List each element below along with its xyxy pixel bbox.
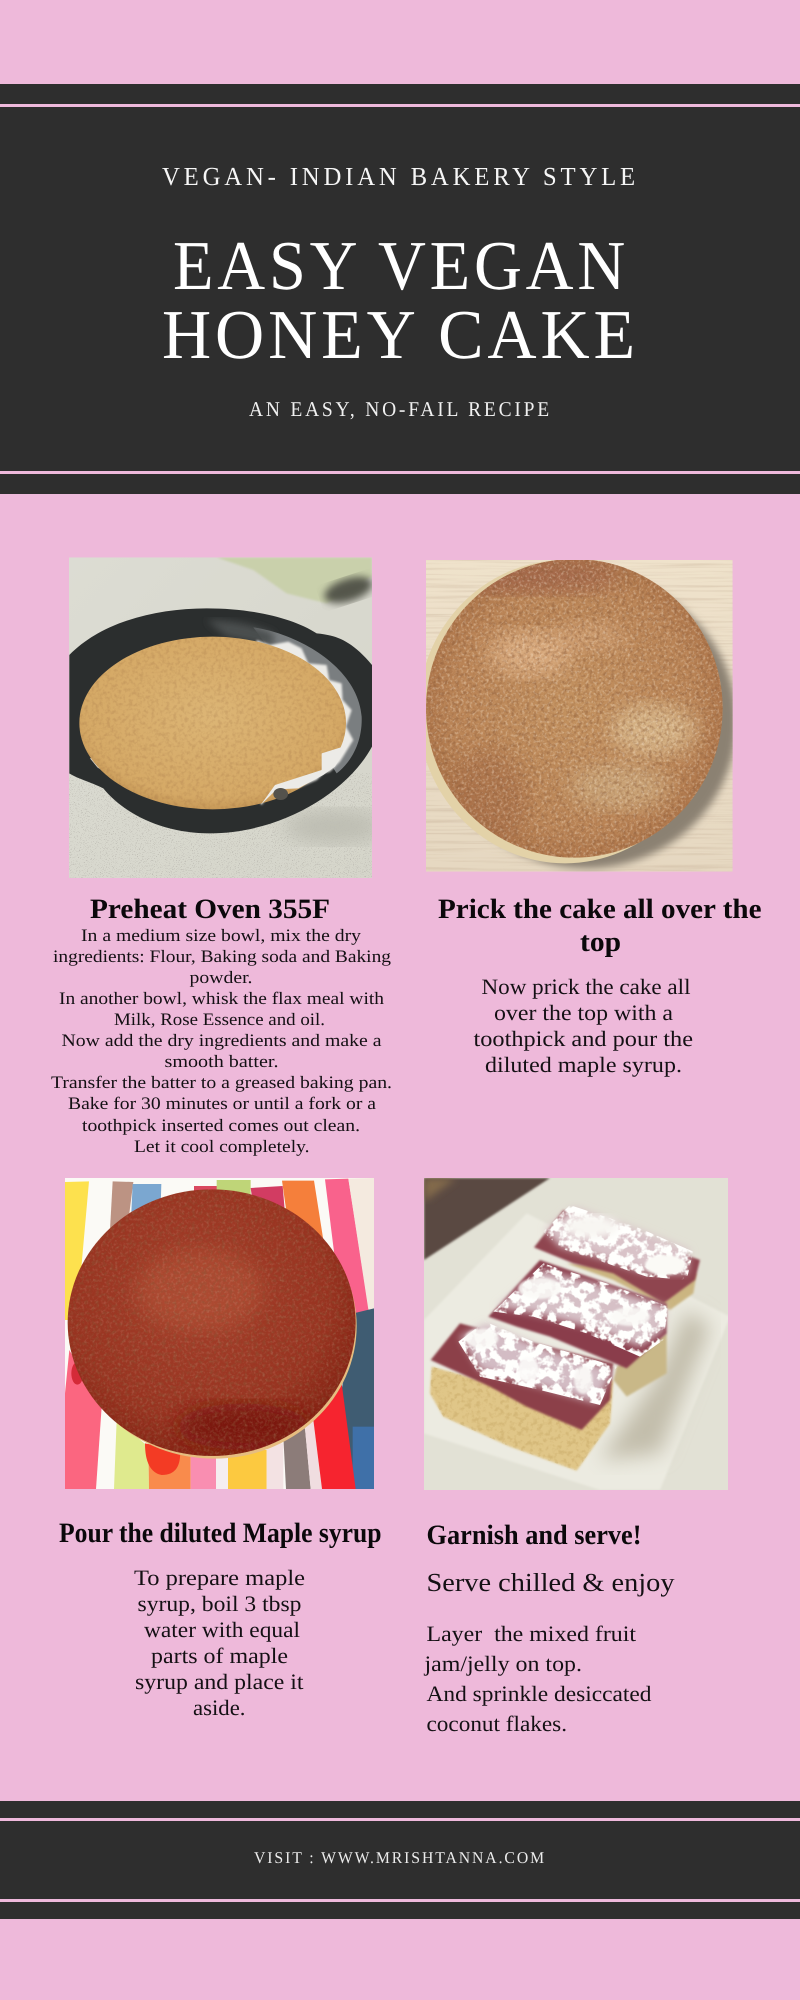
instructions: smooth batter. <box>164 1051 278 1071</box>
instructions: Now prick the cake all <box>482 974 690 999</box>
instructions <box>51 925 392 1156</box>
instructions: In a medium size bowl, mix the dry <box>81 925 361 945</box>
photo: pricked cake on wood board <box>417 557 737 872</box>
header banner <box>0 84 800 494</box>
panel: preheat oven <box>51 557 392 1156</box>
instructions <box>423 1621 652 1736</box>
subtitle: VEGAN- INDIAN BAKERY STYLE <box>162 162 639 191</box>
instructions <box>474 974 693 1077</box>
instructions: Now add the dry ingredients and make a <box>62 1030 382 1050</box>
panel: prick the cake <box>417 557 762 1077</box>
instructions: toothpick and pour the <box>474 1026 693 1051</box>
instructions: To prepare maple <box>134 1565 305 1590</box>
website link text: VISIT : WWW.MRISHTANNA.COM <box>254 1848 546 1867</box>
pan <box>69 608 372 833</box>
back square <box>533 1200 700 1310</box>
instructions: jam/jelly on top. <box>423 1651 582 1676</box>
cake <box>79 637 346 809</box>
instructions: In another bowl, whisk the flax meal with <box>59 988 384 1008</box>
instructions: Layer the mixed fruit <box>426 1621 636 1646</box>
title: EASY VEGAN <box>173 228 629 305</box>
subheading: Serve chilled & enjoy <box>426 1568 674 1597</box>
instructions: Milk, Rose Essence and oil. <box>114 1009 325 1029</box>
heading: top <box>580 927 621 958</box>
instructions: Transfer the batter to a greased baking pan. <box>51 1072 392 1092</box>
instructions: Let it cool completely. <box>134 1136 310 1156</box>
heading: Prick the cake all over the <box>438 894 762 925</box>
parchment paper <box>255 639 354 806</box>
footer banner <box>0 1801 800 1919</box>
instructions: ingredients: Flour, Baking soda and Baking <box>53 946 391 966</box>
heading: Garnish and serve! <box>426 1520 642 1551</box>
instructions <box>134 1565 305 1720</box>
instructions: aside. <box>193 1695 246 1720</box>
middle square <box>488 1260 670 1397</box>
instructions: parts of maple <box>151 1643 288 1668</box>
title <box>162 228 639 374</box>
heading <box>438 894 762 958</box>
front square <box>428 1320 620 1473</box>
photo: cake squares with jam and coconut <box>424 1178 730 1490</box>
heading: Pour the diluted Maple syrup <box>59 1518 382 1549</box>
instructions: powder. <box>190 967 252 987</box>
title: HONEY CAKE <box>162 297 639 374</box>
panel: pour the syrup <box>59 1178 382 1720</box>
instructions: diluted maple syrup. <box>485 1052 682 1077</box>
tagline: AN EASY, NO-FAIL RECIPE <box>249 397 552 421</box>
instructions: over the top with a <box>494 1000 673 1025</box>
instructions: syrup and place it <box>135 1669 304 1694</box>
heading: Preheat Oven 355F <box>90 894 330 925</box>
instructions: water with equal <box>144 1617 300 1642</box>
photo: baked cake in pan <box>69 557 383 878</box>
instructions: coconut flakes. <box>426 1711 567 1736</box>
photo: syrup glazed cake on striped mat <box>63 1178 374 1489</box>
instructions: syrup, boil 3 tbsp <box>138 1591 302 1616</box>
panel: garnish and serve <box>423 1178 730 1736</box>
instructions: And sprinkle desiccated <box>426 1681 652 1706</box>
instructions: toothpick inserted comes out clean. <box>82 1115 360 1135</box>
instructions: Bake for 30 minutes or until a fork or a <box>68 1093 376 1113</box>
